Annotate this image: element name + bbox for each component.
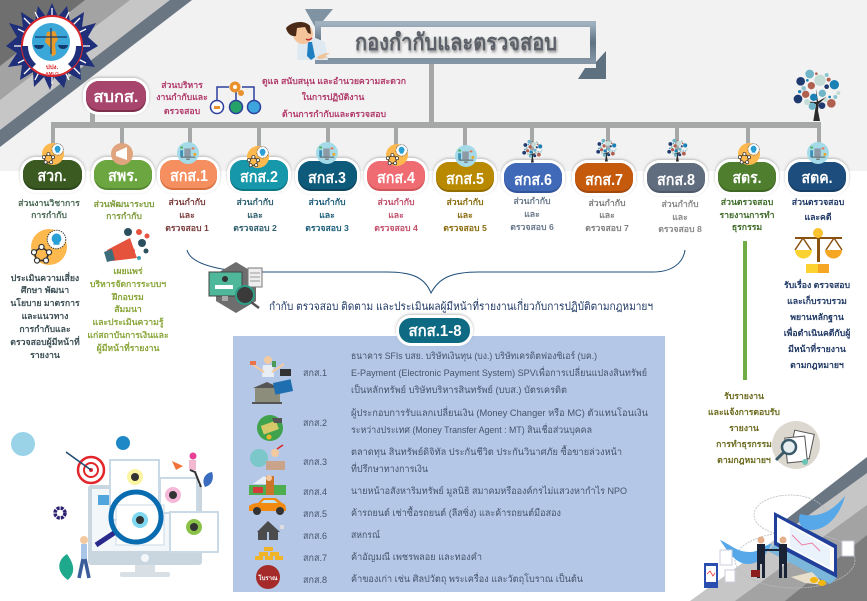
icon: documents and magnifier [772, 421, 820, 469]
circle [11, 432, 35, 456]
row: สกส.8 [256, 565, 583, 589]
badge: สตร. [732, 170, 762, 187]
row: สกส.8: สกส.8 [303, 575, 327, 586]
text: สตค. duties [784, 278, 850, 370]
icon [177, 142, 199, 164]
orbit rings [735, 495, 855, 588]
monitor [768, 512, 837, 584]
illustration: business handshake and dashboard [704, 495, 855, 588]
text: สพร. duties: บริหารจัดการระบบฯ [90, 279, 166, 289]
badge: สกส.7 [585, 172, 623, 189]
globe [116, 436, 130, 450]
caption: ตรวจสอบ 8 [658, 224, 702, 234]
caption: ตรวจสอบ 2 [233, 223, 277, 233]
text: สตร. duties: รับรายงาน [724, 391, 764, 401]
badge: สกส.5 [446, 171, 484, 188]
caption [374, 197, 418, 233]
caption [233, 197, 277, 233]
badge: สกส.4 [377, 170, 415, 187]
text: สตค. duties: เพื่อดำเนินคดีกับผู้ [784, 326, 850, 339]
text: supervision statement: กำกับ ตรวจสอบ ติดตาม และประเมินผลผู้มีหน้าที่รายงานเกี่ยวกับการปฏิบัติตามกฎหมายฯ [269, 298, 653, 313]
magnifier [96, 492, 161, 545]
target [66, 452, 104, 483]
row: สกส.1: ธนาคาร SFIs บสย. บริษัทเงินทุน (บง.) บริษัทเครดิตฟองซิเอร์ (บค.) [351, 350, 597, 362]
text: สตร. duties [708, 391, 780, 465]
caption: รายงานการทำ [719, 210, 775, 220]
unit: สกส.6 [501, 140, 565, 232]
icon [316, 142, 338, 164]
row: สกส.5 [249, 498, 561, 520]
unit: สกส.7 [572, 139, 636, 233]
text: สวก. duties: การกำกับและ [19, 324, 71, 334]
caption: ส่วนกำกับ [446, 197, 484, 207]
icon [738, 143, 760, 165]
icon [455, 145, 477, 167]
paper plane [172, 461, 183, 470]
text: สตร. duties: และแจ้งการตอบรับ [708, 407, 780, 417]
ribbon [799, 496, 845, 530]
caption [585, 198, 629, 233]
icon: car [249, 498, 286, 515]
row: สกส.5: สกส.5 [303, 509, 327, 520]
icon: gold bars [255, 547, 283, 560]
tablet [704, 563, 718, 588]
icon: real estate agent [249, 475, 286, 495]
icon: computer inspection [209, 262, 262, 313]
icon [522, 140, 543, 162]
badge: สวก. [38, 168, 66, 185]
caption: ตรวจสอบ 1 [165, 223, 209, 233]
icon [596, 139, 617, 161]
text: สพร. duties [87, 266, 169, 354]
logo: AMLO emblem: AMLO [45, 71, 59, 76]
unit: สกส.4 [364, 144, 428, 233]
text: admin unit name: งานกำกับและ [156, 92, 208, 102]
caption [510, 196, 554, 232]
caption: ส่วนกำกับ [588, 198, 626, 208]
unit: สกส.1 [157, 142, 220, 233]
icon: gears organisation chart [210, 82, 260, 114]
icon [667, 139, 688, 161]
caption: การกำกับ [106, 211, 142, 221]
text: admin unit duties: ดูแล สนับสนุน และอำนวยความสะดวก [262, 76, 406, 87]
text: สตค. duties: ตามกฎหมายฯ [790, 360, 844, 370]
caption [792, 197, 845, 222]
icon: scales of justice [795, 228, 842, 273]
woman on laptop [189, 452, 213, 487]
row: สกส.7 [255, 547, 482, 564]
background: top grey band [0, 0, 867, 171]
row: สกส.1: เป็นหลักทรัพย์ บริษัทบริหารสินทรัพย์ (บบส.) บัตรเครดิต [351, 383, 567, 396]
businessmen [757, 536, 787, 578]
caption: และ [457, 210, 473, 220]
title: banner frame [305, 9, 606, 79]
heading: กองกำกับและตรวจสอบ [355, 29, 557, 55]
badge: สกส.1-8 [396, 315, 473, 346]
caption: ส่วนกำกับ [661, 199, 699, 209]
row: สกส.6: สหกรณ์ [351, 529, 380, 541]
connectors: organisation chart lines [51, 62, 821, 150]
badge: สพร. [108, 168, 138, 185]
gear [55, 508, 65, 518]
mini charts [720, 541, 854, 582]
caption: และ [179, 210, 195, 220]
text: สตร. duties: การทำธุรกรรม [716, 439, 772, 450]
caption: การกำกับ [31, 210, 67, 220]
text: สพร. duties: แก่สถาบันการเงินและ [87, 330, 169, 340]
icon: antique stamp: โบราณ [257, 574, 278, 582]
text: สตค. duties: พยานหลักฐาน [790, 312, 844, 323]
caption: ตรวจสอบ 5 [443, 223, 487, 233]
row: สกส.6: สกส.6 [303, 531, 327, 542]
caption: ส่วนกำกับ [513, 196, 551, 206]
text: admin unit name: ตรวจสอบ [164, 106, 201, 116]
caption: และ [672, 212, 688, 222]
text: สวก. duties: ประเมินความเสี่ยง [11, 271, 79, 283]
row: สกส.5: ค้ารถยนต์ เช่าซื้อรถยนต์ (ลีสซิ่ง) และค้ารถยนต์มือสอง [351, 506, 561, 519]
decoration: bottom-right diagonal stripes [690, 457, 867, 601]
unit: สกส.5 [433, 145, 497, 233]
unit: สกส.8 [644, 139, 708, 234]
row: สกส.8: ค้าของเก่า เช่น ศิลปวัตถุ พระเครื่อง และวัตถุโบราณ เป็นต้น [351, 572, 583, 585]
text: admin unit name: ส่วนบริหาร [161, 80, 203, 90]
row: สกส.3 [250, 445, 622, 475]
icon: big tree [794, 70, 840, 121]
row: สกส.6 [257, 521, 380, 542]
unit: สพร. [91, 143, 155, 221]
badge: สกส.1 [170, 168, 208, 185]
row: สกส.2: ผู้ประกอบการรับแลกเปลี่ยนเงิน (Money Changer หรือ MC) ตัวแทนโอนเงิน [351, 406, 648, 419]
row: สกส.7: ค้าอัญมณี เพชรพลอย และทองคำ [351, 551, 482, 563]
panel: สกส.1-8 regulated entities [233, 336, 665, 592]
text: สตร. duties: รายงาน [729, 423, 759, 433]
row: สกส.4: สกส.4 [303, 487, 327, 498]
row: สกส.2 [257, 406, 648, 441]
row: สกส.3: ที่ปรึกษาทางการเงิน [351, 462, 428, 475]
badge: สบกส. [83, 78, 149, 115]
row: สกส.3: ตลาดทุน สินทรัพย์ดิจิทัล ประกันชีวิต ประกันวินาศภัย ซื้อขายล่วงหน้า [351, 445, 622, 458]
illustration: people search on monitor [11, 432, 218, 580]
money and coins [791, 572, 826, 586]
row: สกส.2: สกส.2 [303, 418, 327, 429]
row: สกส.1: E-Payment (Electronic Payment System) SPVเพื่อการเปลี่ยนแปลงสินทรัพย์ [351, 366, 647, 379]
row: สกส.2: ระหว่างประเทศ (Money Transfer Agent : MT) สินเชื่อส่วนบุคคล [351, 423, 592, 436]
caption: และ [599, 210, 615, 220]
caption: ธุรกรรม [732, 222, 762, 233]
unit: สตค. [785, 142, 849, 222]
row: สกส.7: สกส.7 [303, 553, 327, 564]
badge: สตค. [802, 170, 832, 187]
caption: ตรวจสอบ 4 [374, 223, 418, 233]
text: สวก. duties: นโยบาย มาตรการ [10, 297, 80, 308]
caption: และ [524, 209, 540, 219]
icon: megaphone circle [111, 143, 133, 165]
caption: ส่วนกำกับ [236, 197, 274, 207]
caption [94, 199, 155, 221]
text: admin unit duties: ด้านการกำกับและตรวจสอบ [282, 109, 387, 119]
row: สกส.3: สกส.3 [303, 457, 327, 468]
caption [165, 197, 209, 233]
decoration: top-left diagonal stripes [0, 0, 192, 147]
text: สตค. duties: มีหน้าที่รายงาน [788, 342, 846, 354]
icon [807, 142, 829, 164]
caption: ส่วนกำกับ [168, 197, 206, 207]
text: admin unit duties [262, 76, 406, 119]
text: สตค. duties: รับเรื่อง ตรวจสอบ [784, 278, 850, 290]
caption: ส่วนพัฒนาระบบ [94, 199, 155, 209]
unit: สกส.3 [295, 142, 360, 233]
caption [305, 197, 349, 233]
text: สวก. duties [10, 271, 80, 360]
icon: presenter man [286, 22, 330, 60]
caption: และ [388, 210, 404, 220]
unit: สกส.2 [227, 146, 291, 233]
text: สตร. duties: ตามกฎหมายฯ [717, 455, 771, 465]
arrow: curly brace over สกส.1-8 [187, 250, 685, 293]
text: admin unit duties: ในการปฏิบัติงาน [302, 91, 364, 102]
caption: ส่วนกำกับ [377, 197, 415, 207]
badge: สบกส.: สบกส. [94, 89, 138, 106]
icon [386, 144, 408, 166]
row: สกส.1 [250, 350, 647, 404]
badge: สกส.1-8: สกส.1-8 [408, 323, 462, 340]
row: สกส.4 [249, 475, 627, 498]
person [79, 536, 89, 578]
text: admin unit name [156, 80, 208, 116]
caption: และ [247, 210, 263, 220]
text: สพร. duties: เผยแพร่ [113, 266, 143, 276]
caption: และคดี [804, 212, 832, 222]
text: สพร. duties: สัมมนา [114, 304, 142, 314]
caption [658, 199, 702, 234]
connector: สตร. green bar [743, 241, 747, 380]
icon: large bulb network [31, 229, 67, 265]
text: สวก. duties: ตรวจสอบผู้มีหน้าที่ [10, 335, 80, 348]
plant [59, 554, 73, 580]
unit: สวก. [18, 143, 85, 220]
caption: ตรวจสอบ 3 [305, 223, 349, 233]
briefcase [751, 570, 760, 577]
text: สตค. duties: และเก็บรวบรวม [787, 294, 847, 306]
caption: ส่วนตรวจสอบ [721, 197, 774, 207]
text: สพร. duties: ฝึกอบรม [110, 292, 144, 302]
caption: ส่วนกำกับ [308, 197, 346, 207]
text: สพร. duties: ผู้มีหน้าที่รายงาน [97, 341, 159, 354]
caption [443, 197, 487, 233]
caption: ตรวจสอบ 6 [510, 222, 554, 232]
caption: ตรวจสอบ 7 [585, 223, 629, 233]
text: สวก. duties: ศึกษา พัฒนา [20, 285, 69, 295]
monitor [88, 485, 202, 577]
caption: ส่วนตรวจสอบ [792, 197, 845, 207]
icon: investor [250, 445, 285, 470]
badge: สกส.8 [657, 172, 695, 189]
icon: business man [250, 356, 291, 377]
logo: AMLO emblem: ปปง. [46, 63, 58, 71]
badge: สกส.6 [514, 172, 552, 189]
text: สพร. duties: และประเมินความรู้ [92, 317, 164, 328]
caption: และ [319, 210, 335, 220]
caption [719, 197, 775, 233]
icon: megaphone burst [104, 228, 150, 262]
unit: สตร. [715, 143, 779, 233]
row: สกส.1: สกส.1 [303, 368, 327, 379]
text: สวก. duties: และแนวทาง [22, 311, 68, 321]
icon: money hands [257, 415, 283, 441]
logo: AMLO emblem [6, 3, 98, 90]
icon [247, 146, 269, 168]
caption [18, 198, 80, 220]
icon: bulb [42, 143, 64, 165]
text: สวก. duties: รายงาน [30, 350, 60, 360]
icon: bank and cards [252, 379, 293, 404]
caption: ส่วนงานวิชาการ [18, 198, 80, 208]
badge: สกส.2 [240, 169, 278, 186]
row: สกส.4: นายหน้าอสังหาริมทรัพย์ มูลนิธิ สมาคมหรือองค์กรไม่แสวงหากำไร NPO [351, 485, 627, 497]
icon: antique stamp [256, 565, 280, 589]
icon: house [257, 521, 284, 540]
profile cards [110, 460, 218, 552]
badge: สกส.3 [308, 170, 346, 187]
